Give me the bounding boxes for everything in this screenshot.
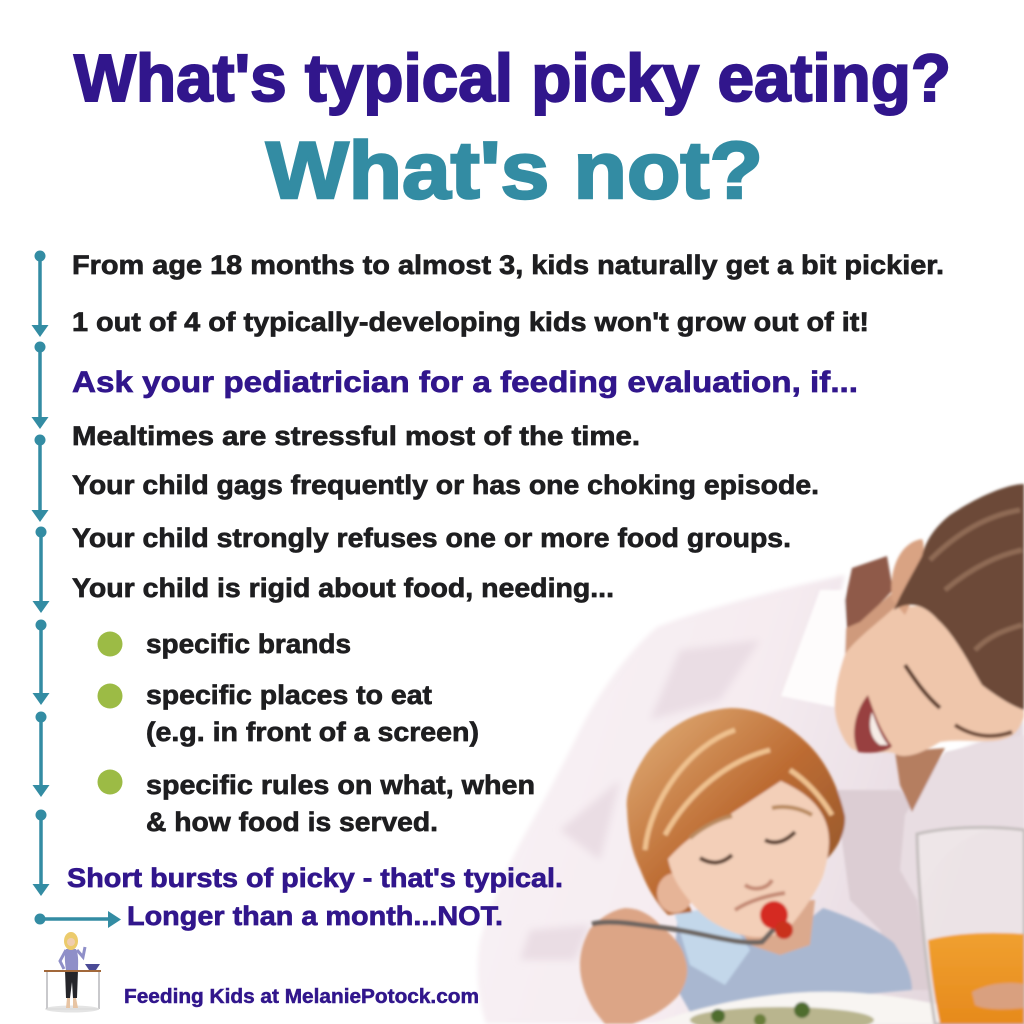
closing line 1: Short bursts of picky - that's typical. xyxy=(67,863,563,893)
father's ear xyxy=(891,539,924,615)
father's hair xyxy=(894,484,1024,710)
title line 1: What's typical picky eating? xyxy=(74,41,951,116)
child's hair strands xyxy=(645,730,832,850)
arrow 7 xyxy=(32,810,50,896)
text: one out of four: 1 out of 4 of typically-developing kids won't grow out of it! xyxy=(72,307,869,337)
arrow 1 xyxy=(32,250,48,337)
fork xyxy=(592,920,782,942)
text: rigid: Your child is rigid about food, needing... xyxy=(72,573,614,603)
bullet text 2 xyxy=(146,680,479,747)
shirt folds xyxy=(520,640,760,960)
father's shirt xyxy=(478,575,1024,1024)
footer: website: Feeding Kids at MelaniePotock.com xyxy=(124,986,479,1008)
child's collar xyxy=(675,905,750,985)
arrow 2 xyxy=(32,342,48,429)
plate xyxy=(652,992,940,1024)
father's eyebrow right xyxy=(955,725,1012,736)
title line 2: What's not? xyxy=(266,126,763,216)
father's neck skin xyxy=(845,590,897,654)
father's eye xyxy=(905,665,940,708)
child's shirt xyxy=(672,908,912,1012)
father's face xyxy=(835,605,1024,756)
bullet text 1: specific brands xyxy=(146,629,351,659)
bullet 2 xyxy=(98,684,122,708)
icon: woman at table xyxy=(44,932,101,1012)
child's hair xyxy=(627,708,845,915)
child's neck xyxy=(725,900,815,955)
bullet text 3 xyxy=(146,770,535,837)
text: refuses: Your child strongly refuses one or more food groups. xyxy=(72,523,791,553)
juice xyxy=(928,933,1024,1024)
child's brows xyxy=(690,807,812,838)
text: gags: Your child gags frequently or has one choking episode. xyxy=(72,470,819,500)
closing line 2: Longer than a month...NOT. xyxy=(127,901,503,931)
subheading: ask your pediatrician: Ask your pediatrician for a feeding evaluation, if... xyxy=(72,366,858,399)
glass xyxy=(917,827,1024,1024)
father's fingers by glass xyxy=(972,983,1024,1009)
child's ear xyxy=(657,873,693,913)
bullet text 3: & how food is served. xyxy=(146,807,438,837)
father's mouth xyxy=(854,695,892,753)
father's neck shadow xyxy=(845,556,893,630)
shirt collar xyxy=(781,590,845,707)
child's face xyxy=(668,781,829,937)
tomato xyxy=(760,901,793,939)
shirt collar right xyxy=(900,735,1024,900)
timeline arrows xyxy=(32,250,121,928)
text: typical pickiness: From age 18 months to almost 3, kids naturally get a bit pickier. xyxy=(72,250,944,280)
salad xyxy=(690,1002,874,1024)
arrow 4 xyxy=(32,526,50,613)
bullet 1 xyxy=(98,632,122,656)
arrow 5 xyxy=(32,620,50,705)
shirt shadow right of child xyxy=(835,790,930,990)
father's lower neck xyxy=(895,748,945,812)
father's hand xyxy=(580,908,687,1024)
father's hair highlights xyxy=(930,510,1022,650)
bullet 3 xyxy=(98,770,122,794)
arrow 3 xyxy=(32,434,48,522)
father's teeth xyxy=(870,712,888,745)
bullet text 2: (e.g. in front of a screen) xyxy=(146,717,479,747)
bullet text 2: specific places to eat xyxy=(146,680,432,710)
photo: father feeding child xyxy=(478,484,1024,1024)
child's nose and lips xyxy=(735,880,785,910)
arrow 8 horizontal xyxy=(34,911,121,928)
arrow 6 xyxy=(32,712,50,797)
text: mealtimes: Mealtimes are stressful most of the time. xyxy=(72,421,640,451)
bullet text 3: specific rules on what, when xyxy=(146,770,535,800)
child's eyes xyxy=(700,832,795,863)
